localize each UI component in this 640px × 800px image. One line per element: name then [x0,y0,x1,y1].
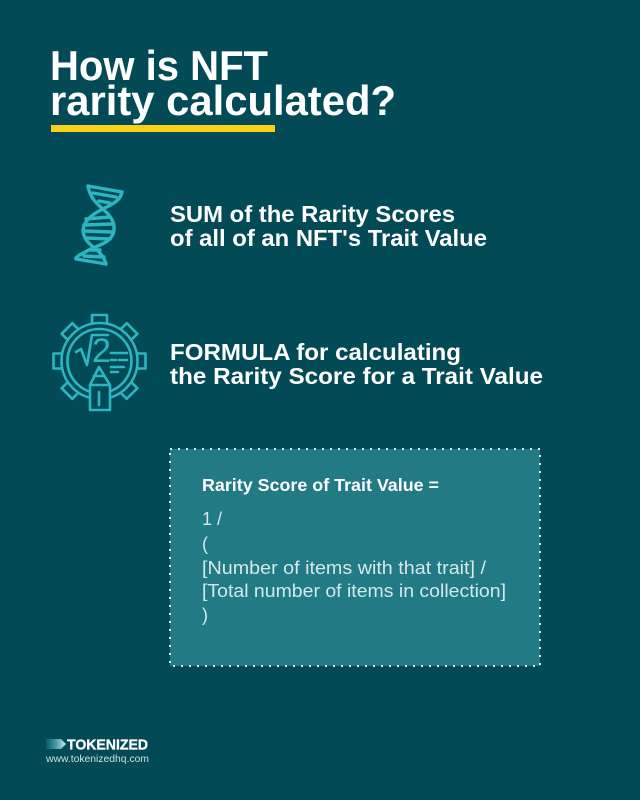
step 2 text: FORMULA for calculating [170,339,461,365]
formula panel [170,449,540,666]
website address: www.tokenizedhq.com [45,753,149,765]
title underline [51,125,275,132]
formula body: 1 / [202,509,222,529]
icon: gear with square root and pencil: 2 [92,332,111,370]
step 2 text: the Rarity Score for a Trait Value [170,363,543,389]
step 1 text [170,201,487,251]
formula body [202,509,506,625]
formula body: [Total number of items in collection] [202,581,506,601]
formula heading: Rarity Score of Trait Value = [202,475,439,495]
logo [46,738,148,754]
title [50,42,396,124]
logo wordmark: TOKENIZED [67,738,148,754]
formula body: ) [202,605,208,625]
title: How is NFT [50,42,268,89]
step 1 text: SUM of the Rarity Scores [170,201,455,227]
formula body: ( [202,534,208,554]
step 1 text: of all of an NFT's Trait Value [170,225,487,251]
step 2 text [170,339,543,389]
icon: gear with square root and pencil [54,315,146,410]
icon: logo mark [46,739,66,749]
formula body: [Number of items with that trait] / [202,558,486,578]
icon: DNA helix [76,186,122,264]
title: rarity calculated? [50,77,396,124]
